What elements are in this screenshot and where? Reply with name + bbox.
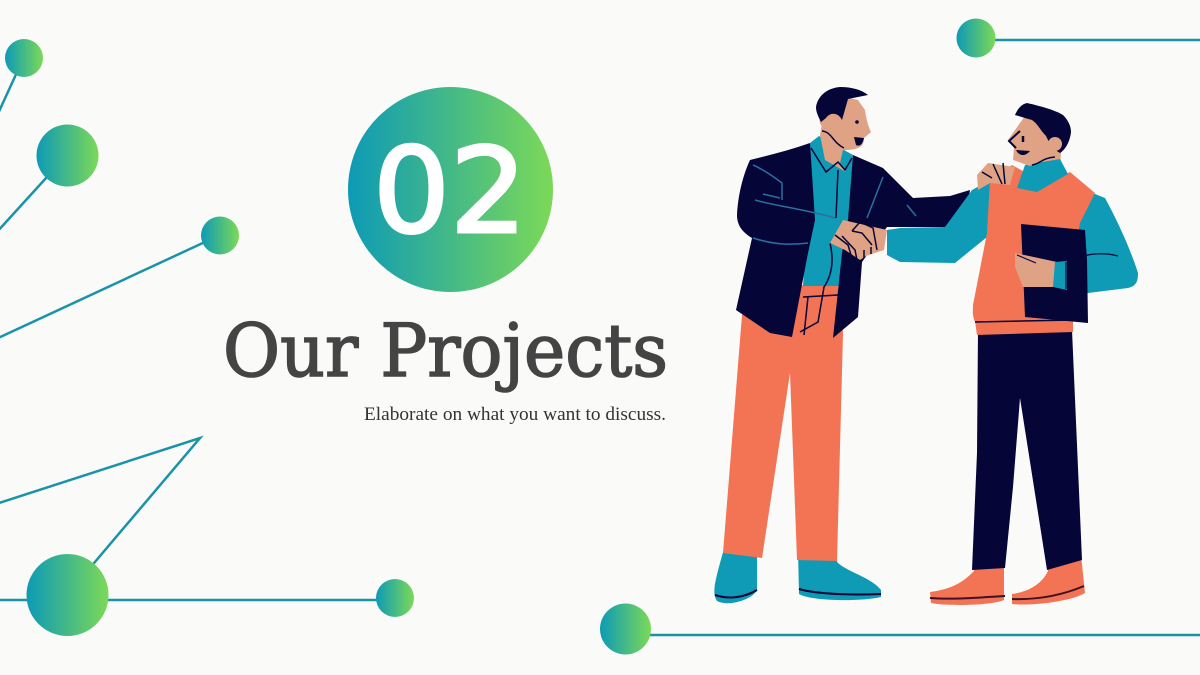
section number badge bbox=[348, 87, 553, 292]
section number badge: 02 bbox=[373, 122, 527, 260]
subtitle: Elaborate on what you want to discuss. bbox=[364, 405, 666, 425]
illustration: two men shaking hands bbox=[714, 87, 1138, 605]
man on left bbox=[714, 87, 970, 603]
man on right bbox=[887, 103, 1138, 605]
title: Our Projects bbox=[223, 309, 668, 394]
handshake bbox=[830, 220, 887, 260]
